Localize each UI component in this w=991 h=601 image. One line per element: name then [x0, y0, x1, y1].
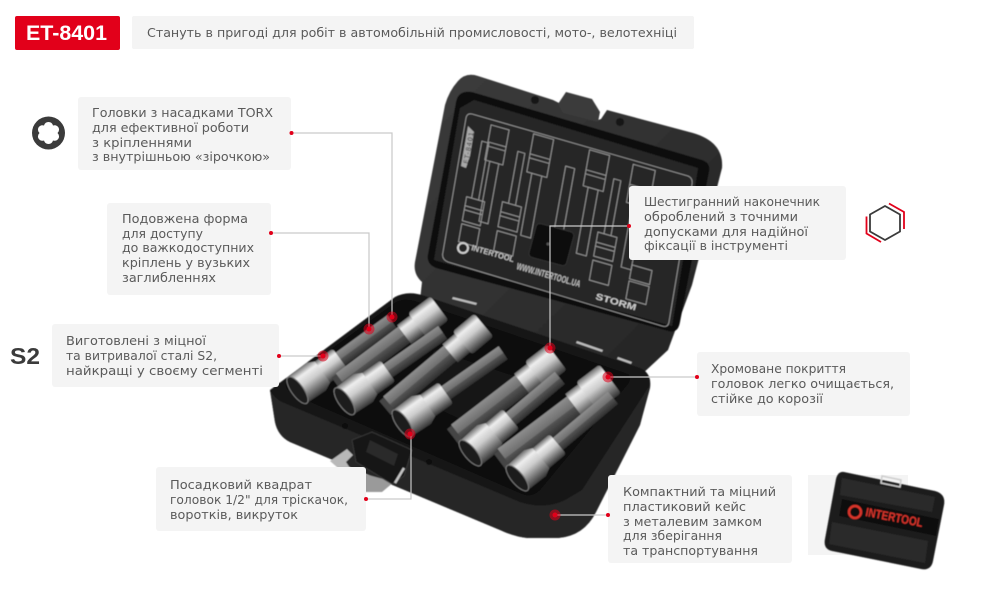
callout: torx [78, 97, 291, 170]
hinge pieces [452, 297, 632, 364]
callout: S2 steel: та витривалої сталі S2, [66, 348, 217, 363]
callout: compact case [608, 475, 792, 563]
icon: torx [32, 116, 65, 150]
case lid [415, 75, 722, 376]
icon: hexagon [866, 204, 904, 242]
socket bit 5 [388, 339, 513, 441]
callout: S2 steel: найкращі у своєму сегменті [66, 363, 263, 378]
socket bit 6 [443, 345, 567, 450]
lid insert with tool outlines: ET-8401 [462, 131, 476, 164]
callout: torx: з внутрішньою «зірочкою» [92, 149, 270, 164]
leader: torx [290, 131, 398, 322]
callout: extended form [107, 203, 271, 295]
socket bit 3 [330, 319, 453, 419]
leader: chrome coating [602, 372, 699, 382]
callout: hex tip: допусками для надійної [644, 224, 809, 239]
closed case photo: INTERTOOL [864, 505, 924, 530]
leader: hex tip [544, 224, 631, 354]
callout: chrome coating: головок легко очищається, [711, 376, 894, 391]
socket bit 7 [455, 365, 571, 470]
lid insert with tool outlines: WWW.INTERTOOL.UA [515, 261, 582, 290]
callout: chrome coating: стійке до корозії [711, 391, 824, 406]
lid insert with tool outlines: INTERTOOL [470, 243, 515, 264]
callout: compact case: Компактний та міцний [623, 484, 776, 499]
callout: chrome coating: Хромоване покриття [711, 361, 846, 376]
callout: extended form: для доступу [122, 226, 203, 241]
callout: compact case: для зберігання [623, 528, 722, 543]
callout: S2 steel [52, 324, 279, 387]
socket bit 2 [328, 296, 448, 397]
case base [270, 293, 650, 538]
photo: open tool case [270, 75, 722, 538]
socket bit 1 [283, 308, 402, 408]
callout: hex tip: оброблений з точними [644, 209, 798, 224]
callout: square drive: головок 1/2" для тріскачок, [170, 492, 348, 507]
callout: extended form: Подовжена форма [122, 211, 248, 226]
callout: torx: Головки з насадками TORX [92, 105, 274, 120]
callout: torx: для ефективної роботи [92, 120, 249, 135]
callout: hex tip: Шестигранний наконечник [644, 194, 820, 209]
callout: torx: з кріпленнями [92, 135, 192, 150]
closed case photo [808, 472, 944, 569]
leader: square drive [364, 428, 416, 501]
callout: hex tip: фіксації в інструменті [644, 238, 788, 253]
callout: chrome coating [697, 352, 910, 416]
socket bit 9 [502, 385, 624, 495]
header description: Стануть в пригоді для робіт в автомобільній промисловості, мото-, велотехніці [147, 25, 677, 40]
lid insert with tool outlines [434, 100, 698, 326]
model badge: ET-8401 [26, 22, 107, 45]
callout: hex tip [629, 186, 846, 260]
callout: square drive [156, 467, 366, 531]
leader: compact case [550, 510, 610, 520]
callout: extended form: до важкодоступних [122, 240, 254, 255]
leader: extended form [269, 231, 374, 334]
callout: compact case: пластиковий кейс [623, 499, 746, 514]
callout: extended form: заглибленнях [122, 270, 216, 285]
model badge [15, 16, 120, 50]
icon: S2 steel: S2 [10, 343, 40, 369]
callout: extended form: кріплень у вузьких [122, 255, 250, 270]
callout: square drive: воротків, викруток [170, 507, 299, 522]
callout: compact case: та транспортування [623, 543, 758, 558]
callout: square drive: Посадковий квадрат [170, 477, 312, 492]
lid insert with tool outlines: STORM [594, 291, 638, 312]
socket bit 8 [489, 365, 621, 476]
leader: S2 steel [277, 350, 328, 362]
callout: compact case: з металевим замком [623, 514, 762, 529]
header description [132, 16, 694, 49]
latch [330, 432, 412, 492]
callout: S2 steel: Виготовлені з міцної [66, 333, 207, 348]
socket bit 4 [375, 314, 493, 419]
